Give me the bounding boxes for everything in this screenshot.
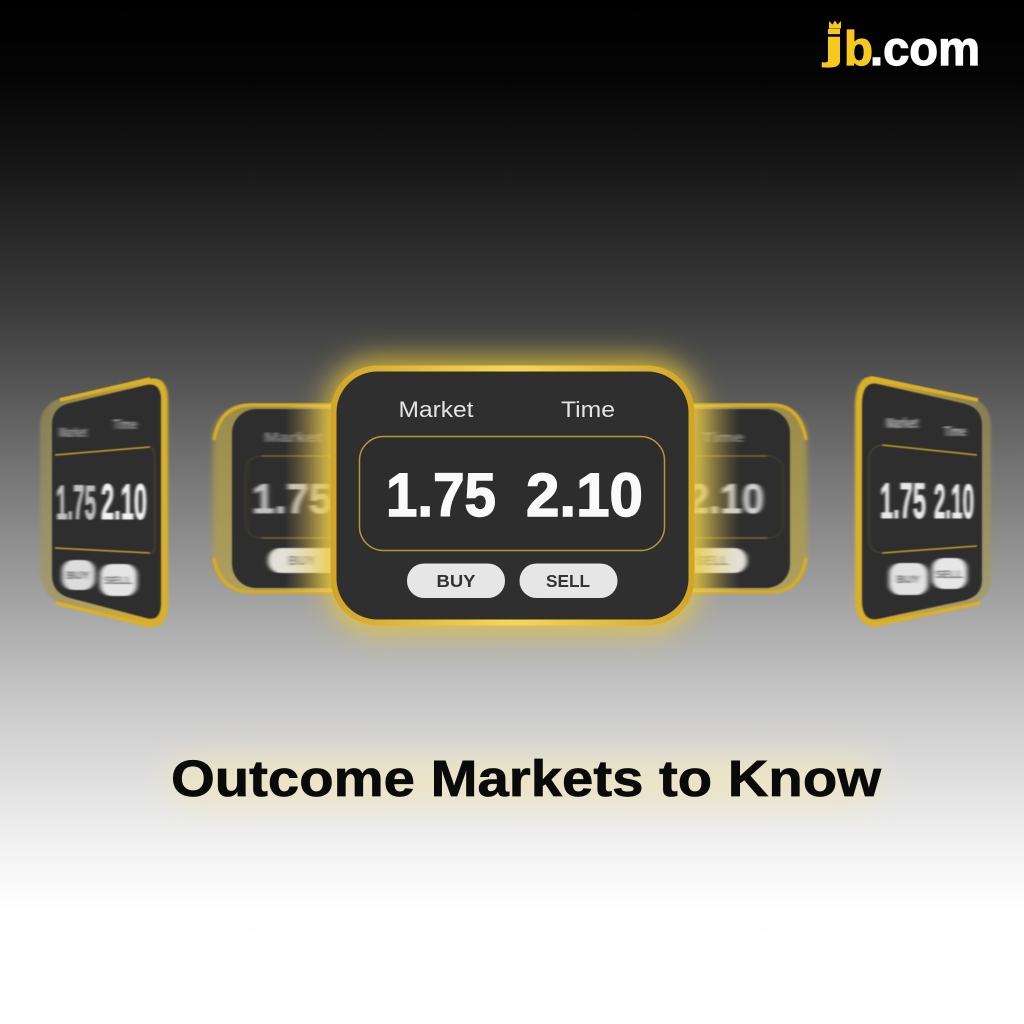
panel: near left card [213,404,373,593]
logo domain: .com [870,23,980,76]
near left buy button: BUY [288,553,316,568]
far left odds panel [55,447,155,553]
title glow [170,755,880,805]
near left odds panel [246,456,345,538]
far right labels [886,415,966,439]
panel: far left card: 2.10 [101,474,147,530]
center labels [398,397,615,422]
far left labels: Time [113,416,137,432]
title: Outcome Markets to Know [171,750,881,807]
right gold spill over near card [690,405,740,592]
center odds numbers [386,461,643,529]
panel: far right card [855,377,991,626]
buy button [407,564,505,598]
center odds numbers: 1.75 [386,461,496,529]
center odds numbers: 2.10 [526,461,643,529]
center labels: Market [398,397,474,422]
buy button: BUY [436,571,476,591]
near left label: Market [264,429,322,445]
far right labels: Time [944,423,966,439]
far right buttons: SELL [935,569,963,581]
far left labels: Market [59,424,87,440]
far right buttons: BUY [896,574,920,586]
sell button: SELL [546,571,590,591]
center odds panel [360,436,664,550]
far left labels [59,416,137,440]
logo letter j: j [822,24,844,68]
center card glow [326,359,699,632]
panel: near right card [651,404,807,593]
far left odds numbers: 1.75 [56,477,96,530]
near right odds: 2.10 [687,475,764,522]
panel: far left card [40,378,168,627]
near right sell button: SELL [695,553,729,568]
icon: crown [829,20,841,28]
left gold spill over near card [285,405,335,592]
near right odds panel [680,456,783,538]
sell button [520,564,618,598]
far left buttons: SELL [104,575,132,587]
near right sell button [670,548,747,573]
logo [822,20,980,76]
panel: center card [334,368,692,622]
far right buttons [889,558,967,595]
far left buttons [62,560,137,596]
far left buttons: BUY [66,570,90,582]
logo letter b: b [844,23,873,76]
near left odds: 1.75 [252,475,332,522]
far right odds panel [869,445,977,553]
far right odds numbers: 1.75 [880,473,926,529]
center labels: Time [561,397,615,422]
near right label: Time [702,429,744,445]
far right labels: Market [886,415,918,432]
near left buy button [268,548,348,573]
